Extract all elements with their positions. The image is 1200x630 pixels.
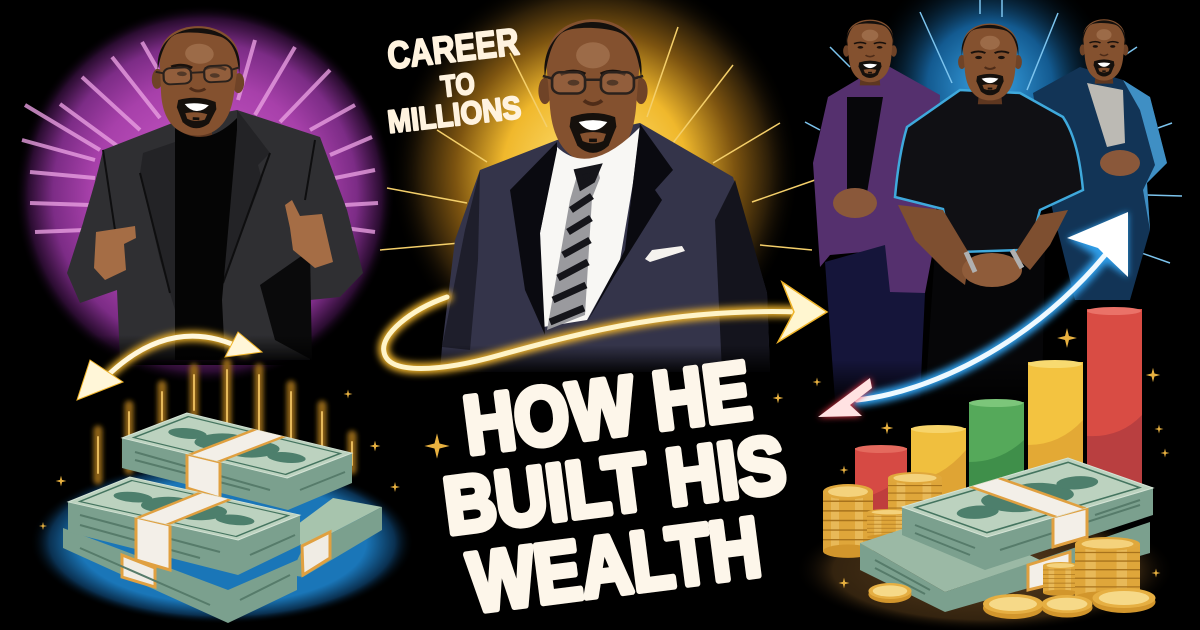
brown floor glow xyxy=(795,508,1175,630)
bar 3 xyxy=(969,399,1024,494)
man in black t-shirt xyxy=(895,23,1083,400)
blue glow xyxy=(865,0,1115,210)
panel: right trio of figures xyxy=(805,0,1182,405)
gold glow xyxy=(390,0,800,377)
coin stack: low xyxy=(867,509,912,540)
sparkles xyxy=(773,328,1170,588)
panel: centre figure on gold glow xyxy=(380,0,815,377)
title line 1: HOW HE xyxy=(459,345,756,472)
bar 5 xyxy=(1087,307,1142,487)
text: to: TO xyxy=(439,67,477,104)
coin stack: front right xyxy=(1075,537,1140,603)
man in black jacket xyxy=(67,24,363,360)
text: career: CAREER xyxy=(385,21,521,78)
coin stack: small xyxy=(1043,562,1078,596)
pocket square xyxy=(645,246,685,262)
bar 4 xyxy=(1028,360,1083,492)
hand: left xyxy=(94,226,136,280)
money stack: main xyxy=(902,458,1153,570)
coin stack: behind money xyxy=(888,472,942,530)
text: millions: MILLIONS xyxy=(386,89,523,140)
loose coins xyxy=(868,583,1156,619)
bar 2 xyxy=(911,425,966,518)
money stack: bottom xyxy=(63,528,297,623)
black turtleneck xyxy=(175,118,237,360)
money stack: top xyxy=(122,413,352,510)
panel: left figure on magenta burst xyxy=(15,5,395,385)
man in dark suit xyxy=(440,19,770,372)
lapels xyxy=(510,142,557,335)
sparkles xyxy=(39,390,400,530)
bar chart xyxy=(855,307,1142,518)
coin stack: left xyxy=(823,484,873,558)
gold rays xyxy=(380,27,815,250)
blue floor glow xyxy=(30,460,414,624)
hand: right xyxy=(285,200,333,268)
title: how he built his wealth xyxy=(439,345,790,630)
bar 1 xyxy=(855,445,907,518)
blue rays xyxy=(805,0,1182,263)
shirt xyxy=(540,127,640,327)
money stack: front xyxy=(68,477,300,575)
tie xyxy=(547,166,600,330)
man in blue blazer xyxy=(1033,19,1167,300)
panel: left money stacks xyxy=(30,363,414,624)
man in purple jacket xyxy=(813,20,940,400)
title line 3: WEALTH xyxy=(463,499,766,630)
gold light streaks xyxy=(98,363,352,480)
burst rays xyxy=(22,40,378,232)
arrow: centre golden swoosh xyxy=(384,282,827,368)
title line 2: BUILT HIS xyxy=(439,419,790,551)
arrow: rising blue arrow xyxy=(818,212,1128,417)
panel: bar chart with cash and coins xyxy=(773,307,1175,630)
tagline: career to millions xyxy=(385,21,523,140)
magenta glow xyxy=(15,5,395,385)
arrow: left double-headed curved arrow xyxy=(77,332,262,400)
sparkle beside title xyxy=(424,433,450,459)
money stack: lower xyxy=(860,515,1150,612)
money stack: rear right xyxy=(290,498,382,577)
